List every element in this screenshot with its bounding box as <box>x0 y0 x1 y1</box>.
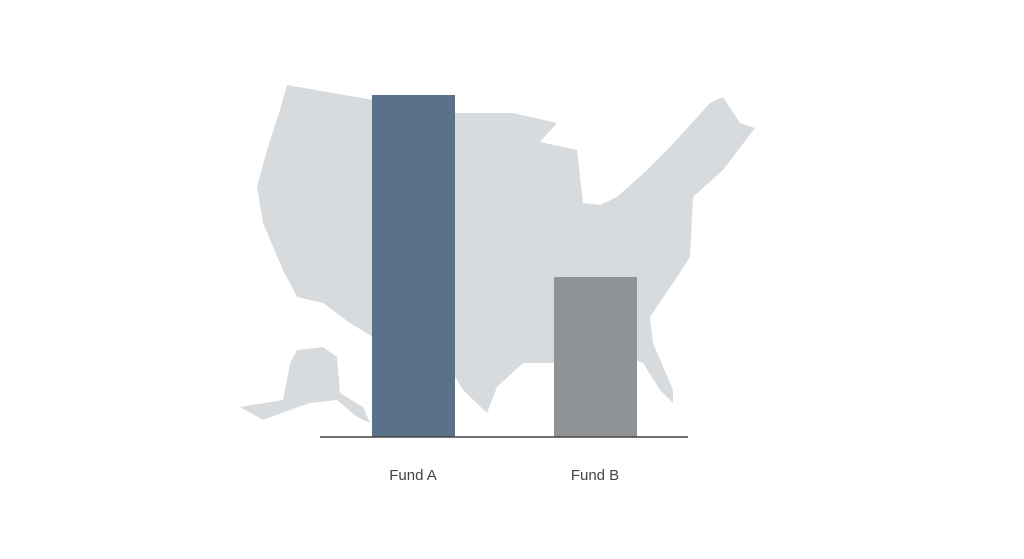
axis baseline <box>320 436 688 438</box>
bar: Fund A <box>372 95 455 437</box>
background map: USA <box>240 85 755 423</box>
label: Fund A: Fund A <box>389 467 437 484</box>
label: Fund B: Fund B <box>571 467 619 484</box>
bar: Fund B <box>554 277 637 437</box>
